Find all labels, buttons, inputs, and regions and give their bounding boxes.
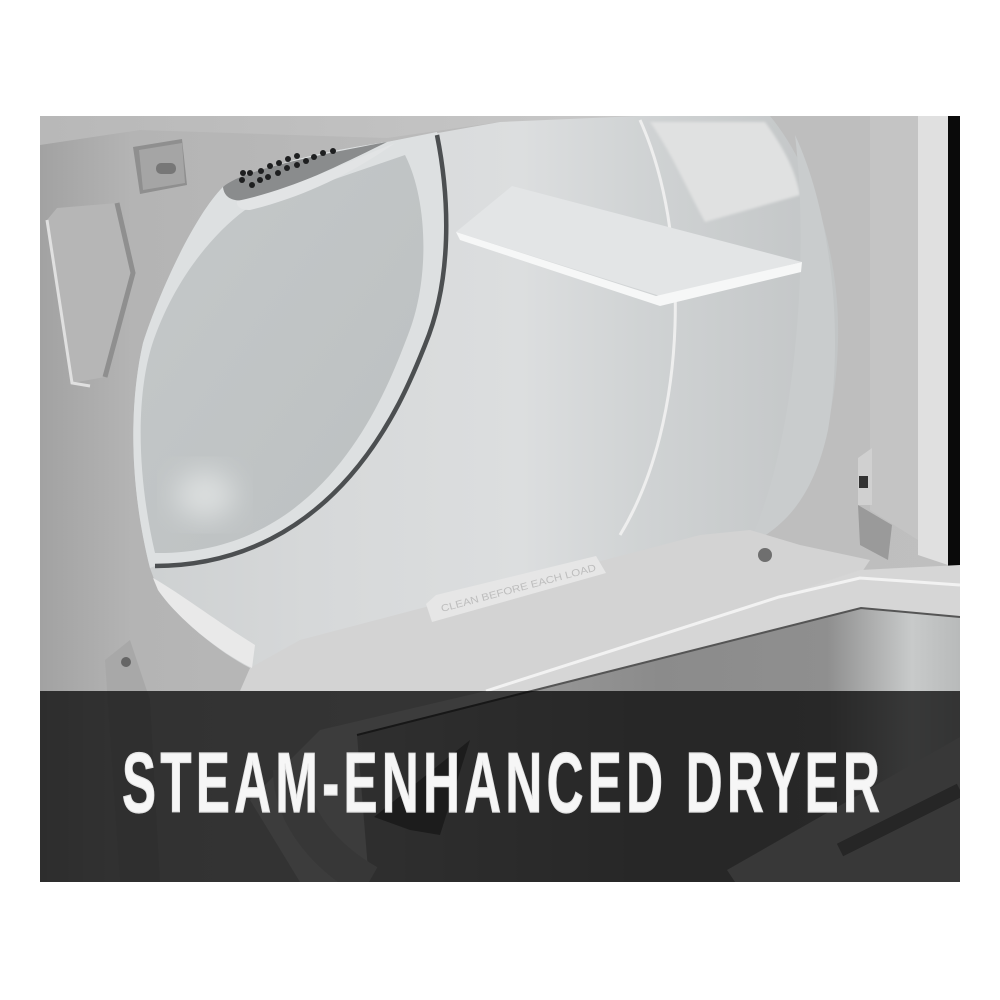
lint screen embossed text: CLEAN BEFORE EACH LOAD [440, 563, 597, 615]
bulkhead highlight [175, 471, 235, 519]
drum seal ring [155, 135, 446, 566]
lint vent [223, 142, 387, 200]
right light strip [918, 116, 948, 565]
stamped panel at left [47, 203, 133, 386]
black strip at right edge [948, 116, 960, 566]
photo: dryer interior [40, 116, 960, 882]
door latch strike [133, 139, 187, 194]
right side panel [870, 116, 918, 540]
door frame lower right [727, 792, 868, 882]
rim of the rear bulkhead [133, 132, 446, 568]
right screw [758, 548, 772, 562]
lower opening ledge [240, 530, 870, 691]
drum baffle shelf [456, 186, 802, 296]
dryer front frame [40, 116, 960, 882]
lower left hinge plate [112, 640, 147, 691]
left screw [121, 657, 131, 667]
vent lower lip [240, 176, 334, 210]
title: STEAM-ENHANCED DRYER [122, 736, 880, 830]
door glass [357, 608, 960, 882]
infographic: dryer photo with title banner [40, 116, 960, 882]
latch stud [156, 163, 176, 174]
right hinge [858, 505, 892, 560]
right inner wall [766, 136, 830, 534]
door seal line [486, 578, 960, 691]
lint screen handle [426, 556, 606, 622]
drum opening [133, 116, 838, 668]
left inner ramp [153, 578, 255, 668]
shelf front edge [456, 232, 802, 306]
open door frame [250, 565, 960, 882]
gasket ring [368, 862, 377, 881]
door glass edge [357, 608, 960, 735]
vent mesh on door [374, 740, 470, 835]
upper drum highlight [650, 122, 800, 222]
drum seam [620, 120, 675, 535]
rear bulkhead [141, 155, 423, 553]
vent holes [239, 148, 336, 188]
banner overlay [40, 691, 960, 882]
door braid seal [840, 790, 960, 850]
top band [40, 116, 630, 145]
